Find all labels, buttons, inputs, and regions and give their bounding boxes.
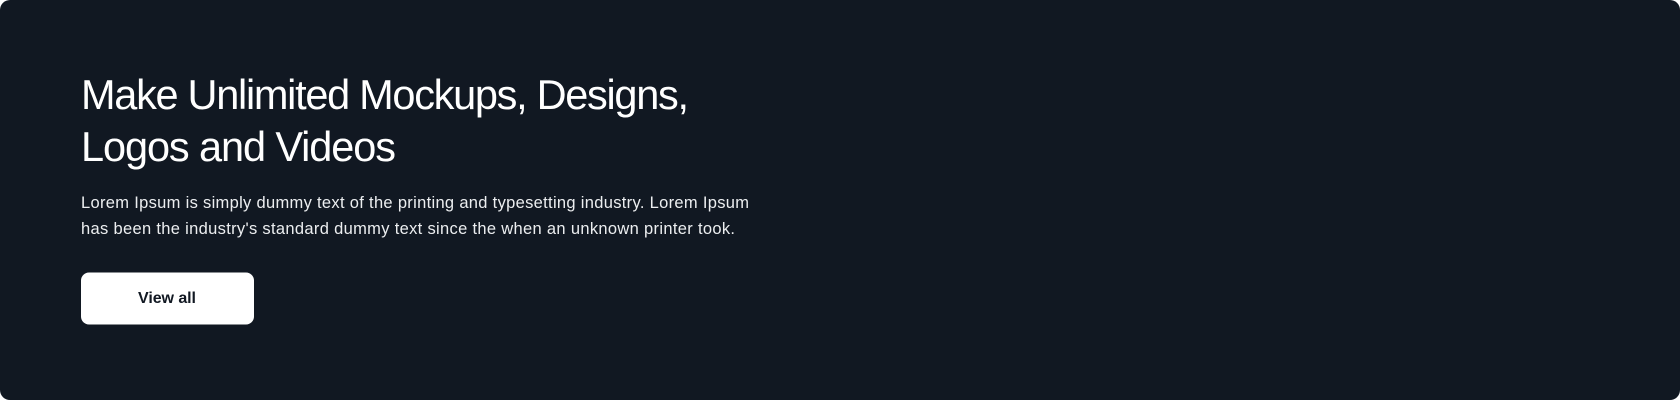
heading — [81, 71, 689, 170]
button: view all — [81, 272, 254, 324]
button: view all: View all — [138, 290, 196, 307]
body text: Lorem Ipsum is simply dummy text of the printing and typesetting industry. Lorem Ipsum — [81, 194, 749, 212]
body text — [81, 194, 749, 238]
body text: has been the industry's standard dummy text since the when an unknown printer took. — [81, 220, 735, 238]
heading: Make Unlimited Mockups, Designs, — [81, 71, 689, 118]
heading: Logos and Videos — [81, 123, 396, 170]
